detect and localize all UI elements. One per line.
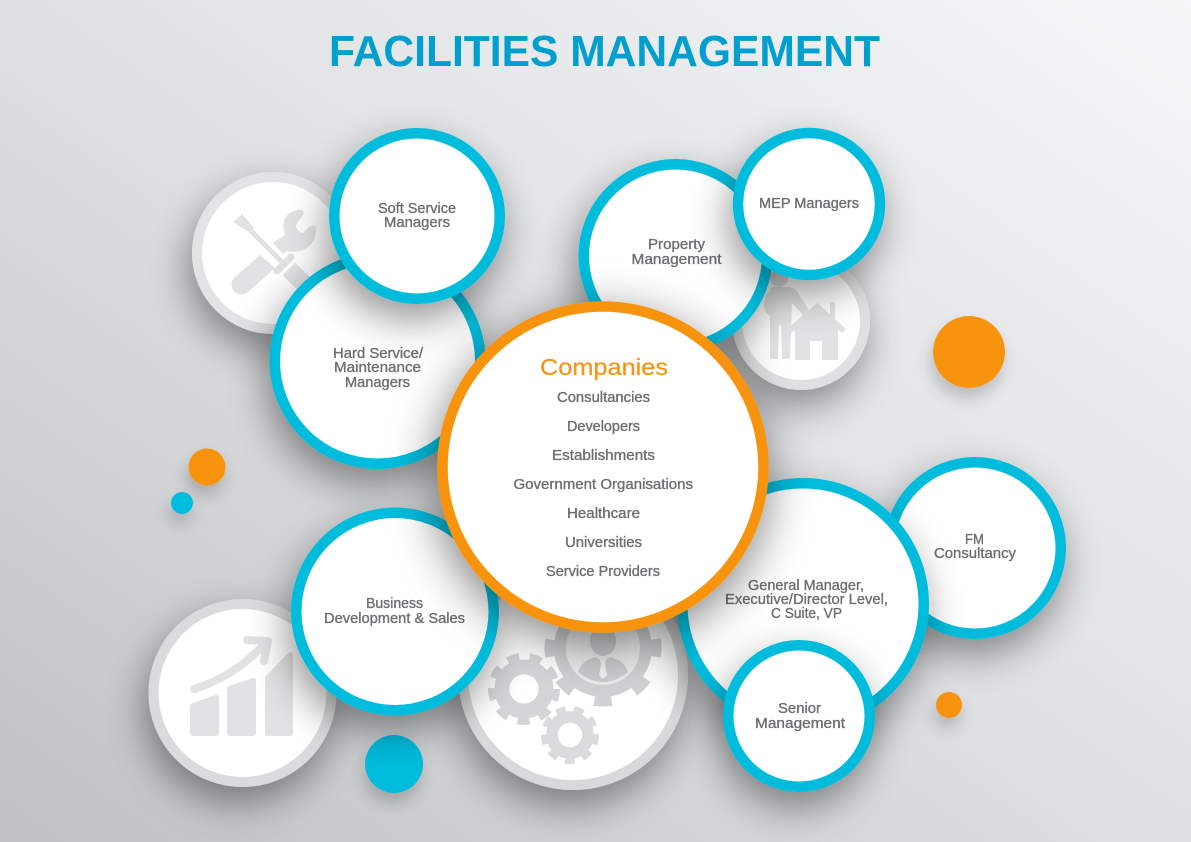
- icon: growth chart: [190, 640, 293, 736]
- label: general manager: C Suite, VP: [771, 606, 842, 622]
- panel: general manager circle: [682, 483, 924, 725]
- decorative dots: [171, 316, 1005, 793]
- list: company types: Government Organisations: [514, 477, 693, 493]
- label: property management: [632, 237, 722, 268]
- icon: small gear: [544, 709, 596, 761]
- label: business development: Business: [366, 596, 423, 612]
- label: soft service: Managers: [384, 215, 450, 231]
- panel: property icon circle: [737, 257, 865, 385]
- icon: medium gear: [492, 656, 556, 722]
- label: hard service: Managers: [345, 375, 410, 391]
- icon: large gear with businessman: [541, 586, 665, 710]
- panel: senior management circle: [728, 645, 870, 787]
- list: company types: Developers: [567, 419, 640, 435]
- label: FM consultancy: FM: [965, 532, 984, 548]
- panel: MEP managers circle: [738, 133, 880, 275]
- panel: business development circle: [296, 513, 494, 710]
- list: company types: Establishments: [552, 448, 655, 464]
- list: company types: Universities: [565, 535, 642, 551]
- label: senior management: Senior: [778, 701, 821, 717]
- label: soft service: [378, 201, 456, 231]
- label: business development: Development & Sales: [324, 611, 465, 627]
- label: business development: [324, 596, 465, 627]
- label: property management: Management: [632, 252, 722, 268]
- heading: companies: Companies: [540, 354, 668, 380]
- label: hard service: Maintenance: [334, 360, 421, 376]
- label: MEP managers: MEP Managers: [759, 196, 859, 212]
- label: senior management: [755, 701, 845, 732]
- label: senior management: Management: [755, 716, 845, 732]
- label: general manager: Executive/Director Level,: [725, 592, 888, 608]
- panel: property management circle: [584, 164, 767, 348]
- panel: hard service circle: [275, 258, 480, 464]
- list: company types: Consultancies: [557, 390, 650, 406]
- label: hard service: [333, 346, 424, 391]
- label: hard service: Hard Service/: [333, 346, 424, 362]
- panel: FM consultancy circle: [889, 462, 1061, 634]
- label: FM consultancy: [934, 532, 1017, 562]
- panel: tools icon circle: [197, 177, 349, 329]
- icon: person and house: [764, 269, 846, 360]
- label: general manager: [725, 578, 888, 622]
- label: soft service: Soft Service: [378, 201, 456, 217]
- icon: wrench and screwdriver: [231, 210, 316, 296]
- label: FM consultancy: Consultancy: [934, 546, 1017, 562]
- list: company types: Healthcare: [567, 506, 640, 522]
- label: property management: Property: [648, 237, 706, 253]
- title: FACILITIES MANAGEMENT: [329, 27, 880, 76]
- panel: growth chart icon circle: [154, 604, 332, 782]
- panel: gears icon circle: [463, 565, 683, 785]
- label: general manager: General Manager,: [748, 578, 864, 594]
- list: company types: [514, 390, 693, 580]
- panel: soft service circle: [334, 133, 500, 299]
- list: company types: Service Providers: [546, 564, 660, 580]
- panel: companies circle: [442, 306, 764, 628]
